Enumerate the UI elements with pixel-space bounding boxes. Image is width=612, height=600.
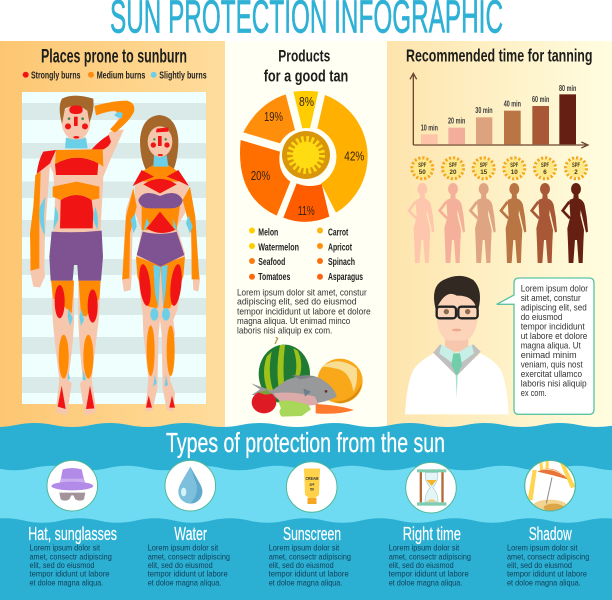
text block: products: adipiscing elit, sed do eiusmod (237, 297, 357, 307)
item: hat, sunglasses: et doloe magna aliqua. (30, 577, 103, 587)
speech bubble: exercitat ullamco (521, 369, 582, 379)
bar chart: time: 20 min (448, 115, 465, 125)
item: hat, sunglasses: Lorem ipsum dolor sit (30, 543, 101, 553)
item: hat, sunglasses: elit, sed do eiusmod (30, 560, 95, 570)
speech bubble: magna aliqua. Ut (521, 340, 581, 350)
legend: products: Watermelon (258, 242, 299, 254)
item: sunscreen: et doloe magna aliqua. (269, 577, 342, 587)
fish (251, 375, 337, 406)
text block: products: Lorem ipsum dolor sit amet, constur (237, 287, 367, 297)
bar chart: time: 40 min (504, 99, 521, 109)
watermelon (259, 337, 310, 403)
item: right time: amet, consectr adipiscing (389, 551, 471, 561)
spf sun badges: SPF (418, 162, 426, 169)
legend: products (249, 227, 363, 283)
icon: sunscreen tube: SPF (310, 483, 315, 487)
pie chart: 11% (298, 203, 315, 218)
item: water: Lorem ipsum dolor sit (148, 543, 219, 553)
item: water: elit, sed do eiusmod (148, 560, 213, 570)
speech bubble (497, 278, 594, 414)
text block: products: laboris nisi aliquip ex com. (237, 325, 332, 335)
legend: products: Carrot (328, 227, 349, 239)
item: hat, sunglasses: tempor ididunt ut labore (30, 569, 110, 579)
speech bubble: laboris nisi aliquip (521, 378, 587, 388)
speech bubble: ex com. (521, 388, 547, 398)
legend: products: Tomatoes (258, 271, 290, 283)
spf sun badges: SPF (480, 162, 488, 169)
item: shadow: et doloe magna aliqua. (507, 577, 581, 587)
item: sunscreen: tempor ididunt ut labore (269, 569, 349, 579)
item: right time: tempor ididunt ut labore (389, 569, 469, 579)
melon (317, 359, 363, 403)
spf sun badges: 50 (419, 169, 426, 176)
item: water: et doloe magna aliqua. (148, 577, 221, 587)
bar chart: time: 30 min (475, 105, 493, 115)
legend: products: Seafood (258, 256, 285, 268)
hair (60, 96, 94, 124)
pie chart (240, 91, 368, 222)
item: sunscreen: amet, consectr adipiscing (269, 551, 351, 561)
lettuce (278, 401, 311, 417)
legend: burn levels: Strongly burns (31, 69, 81, 81)
text block: products: magna aliqua. Ut enimad minco (237, 316, 350, 326)
legend: products: Apricot (328, 242, 352, 254)
panel: types of protection (0, 423, 612, 600)
item: shadow: Shadow (529, 523, 572, 544)
bar chart: time: 80 min (559, 83, 576, 93)
legend: products: Melon (258, 227, 278, 239)
legend: products: Spinach (328, 256, 355, 268)
spf sun badges: SPF (510, 162, 518, 169)
item: hat, sunglasses (28, 460, 117, 587)
legend: burn levels: Slightly burns (159, 69, 207, 81)
icon: hat and sunglasses (51, 468, 93, 501)
item: sunscreen: Lorem ipsum dolor sit (269, 543, 340, 553)
swimsuit (137, 193, 184, 267)
figure: woman (122, 115, 200, 412)
spf sun badges: 2 (574, 169, 578, 176)
spf sun badges: 6 (543, 169, 547, 176)
item: hat, sunglasses: amet, consectr adipiscing (30, 551, 112, 561)
item: right time: elit, sed do eiusmod (389, 560, 454, 570)
item: water: amet, consectr adipiscing (148, 551, 230, 561)
figure: man (30, 96, 134, 415)
bar chart: time: 60 min (532, 94, 549, 104)
item: hat, sunglasses: Hat, sunglasses (28, 523, 117, 544)
spf sun badges (412, 158, 586, 178)
icon: hourglass (417, 469, 446, 506)
icon: sunscreen tube (304, 468, 320, 504)
speech bubble: Lorem ipsum dolor (521, 284, 588, 294)
spf sun badges: 20 (450, 169, 457, 176)
illustration: food (251, 337, 363, 417)
heading: products (264, 47, 348, 86)
pie chart: 19% (264, 109, 283, 124)
spf sun badges: 15 (480, 169, 488, 176)
item: water (148, 460, 230, 587)
shorts (49, 231, 103, 281)
sun center (282, 131, 330, 179)
pie chart: 42% (344, 148, 365, 164)
carrot (316, 404, 354, 414)
panel: recommended time for tanning (387, 41, 612, 431)
panel: places prone to sunburn (0, 41, 225, 431)
bar chart: time (410, 73, 588, 148)
item: water: tempor ididunt ut labore (148, 569, 228, 579)
pie chart: 8% (299, 94, 314, 109)
speech bubble: enimad minim (521, 350, 577, 360)
heading: products: Products (278, 47, 330, 66)
legend: burn levels (23, 69, 207, 81)
legend: products: Asparagus (328, 271, 363, 283)
speech bubble: do eiusmod (521, 312, 562, 322)
spf sun badges: 10 (511, 169, 518, 176)
item: right time: Lorem ipsum dolor sit (389, 543, 460, 553)
item: right time (389, 462, 471, 587)
item: sunscreen: Sunscreen (283, 523, 341, 544)
heading: products: for a good tan (264, 67, 348, 86)
spf sun badges: SPF (449, 162, 457, 169)
item: sunscreen: elit, sed do eiusmod (269, 560, 334, 570)
towel background (22, 92, 206, 404)
pie chart: 20% (251, 168, 271, 183)
legend: burn levels: Medium burns (97, 69, 145, 81)
icon: beach umbrella (525, 460, 575, 512)
item: shadow: tempor ididunt ut labore (507, 569, 587, 579)
heading: types of protection: Types of protection from the sun (166, 427, 445, 458)
icon: sunscreen tube: CREAM (306, 476, 319, 481)
icon: sunscreen tube: 50 (310, 488, 314, 492)
speech bubble: adipiscing elit, sed (521, 303, 587, 313)
item: right time: et doloe magna aliqua. (389, 577, 462, 587)
spf sun badges: SPF (572, 162, 580, 169)
text block: products (237, 287, 371, 335)
bar chart: time: 10 min (421, 123, 438, 133)
spf sun badges: SPF (541, 162, 549, 169)
item: shadow: elit, sed do eiusmod (507, 560, 572, 570)
item: right time: Right time (403, 523, 461, 544)
doctor illustration (405, 276, 509, 414)
text block: products: tempor incididunt ut labore et dolore (237, 306, 371, 316)
item: shadow (507, 460, 590, 587)
item: shadow: Lorem ipsum dolor sit (507, 543, 578, 553)
heading: places: Places prone to sunburn (41, 47, 187, 68)
speech bubble: sit amet, constur (521, 293, 581, 303)
item: sunscreen (269, 462, 351, 587)
speech bubble: ut labore et dolore (521, 331, 587, 341)
icon: water drop (178, 467, 202, 504)
tomato (252, 390, 276, 413)
skin tone silhouettes (409, 183, 588, 263)
item: water: Water (174, 523, 207, 544)
speech bubble: veniam, quis nost (521, 359, 583, 369)
panel: products for a good tan (225, 41, 387, 431)
speech bubble: tempor incididunt (521, 321, 585, 331)
item: shadow: amet, consectr adipiscing (507, 551, 590, 561)
